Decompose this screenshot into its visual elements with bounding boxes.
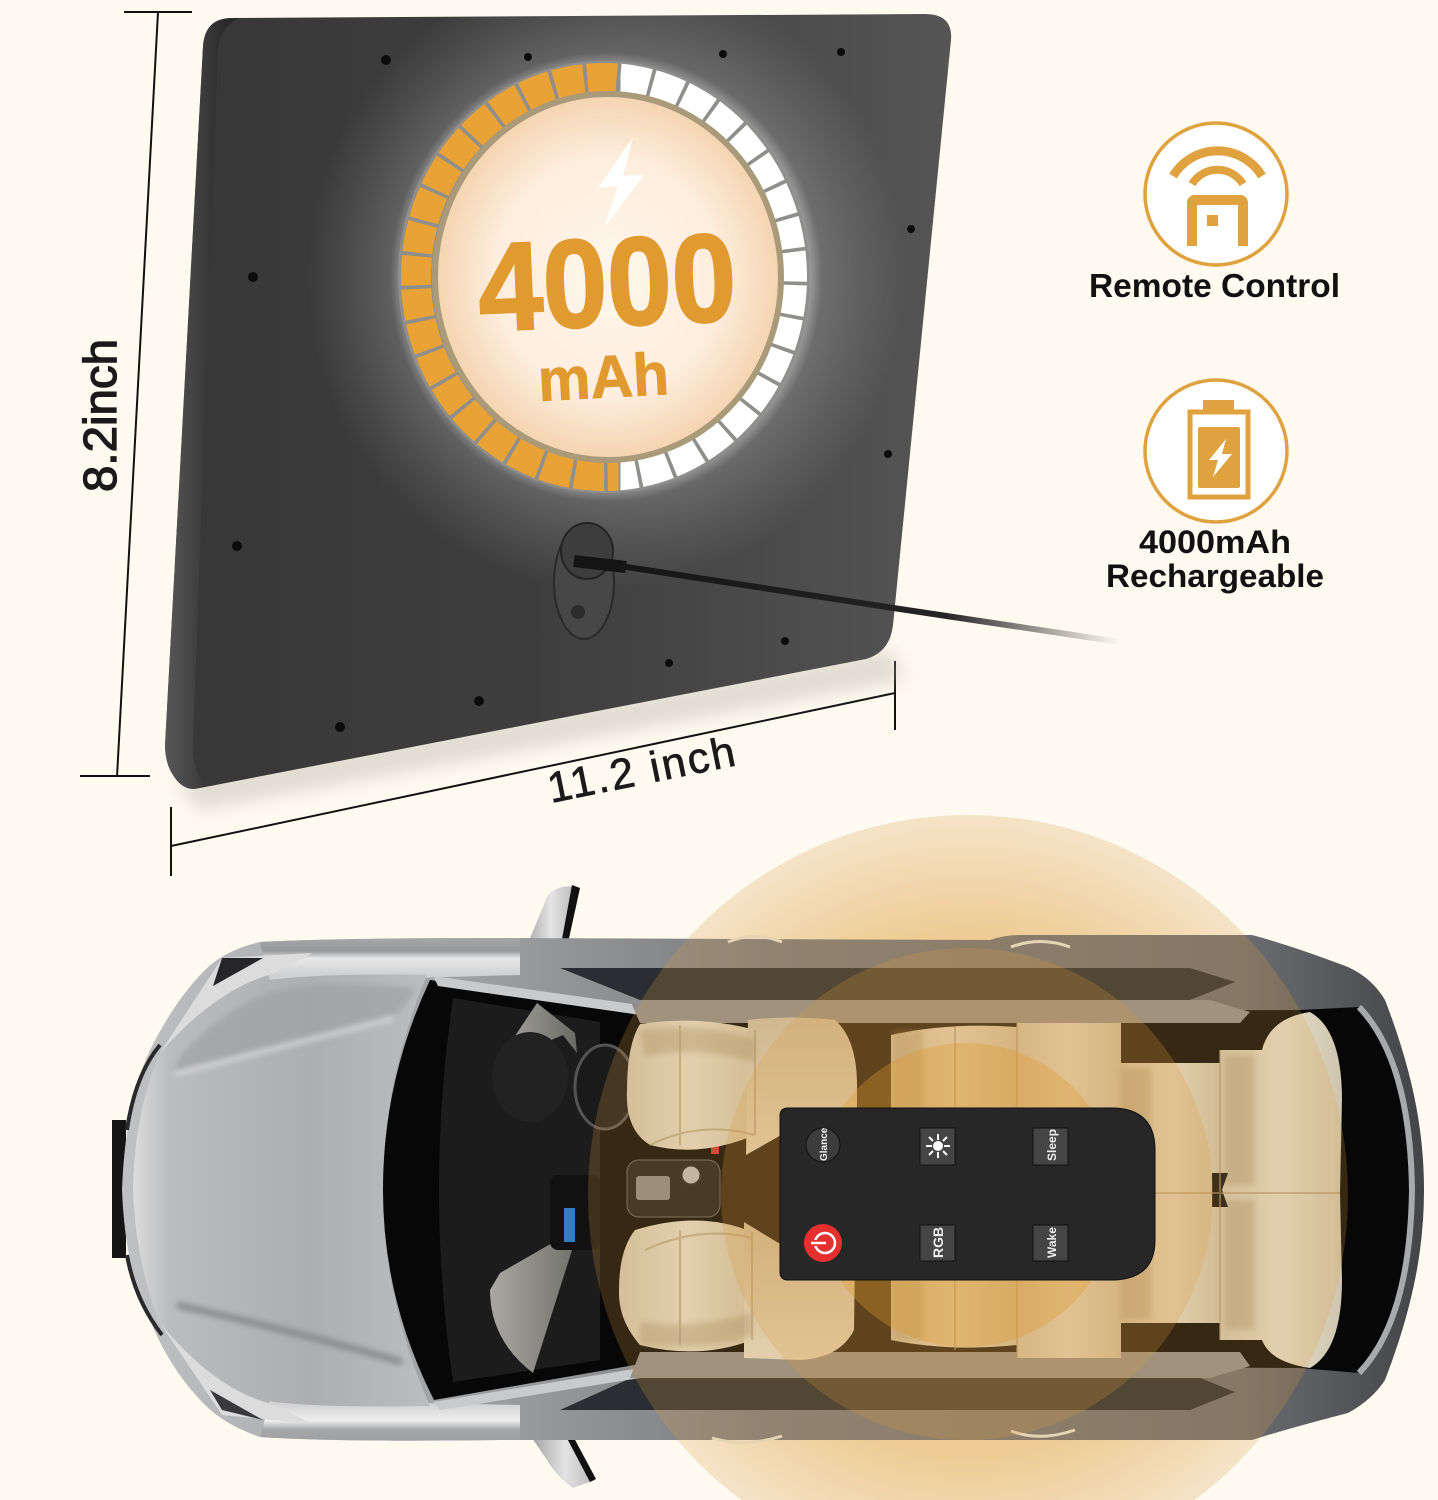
rear window trim (1359, 1007, 1412, 1373)
steering wheel (575, 1045, 635, 1129)
RGB button (920, 1225, 955, 1261)
icon: battery (1145, 380, 1287, 522)
seat notch (1212, 1173, 1228, 1207)
side panel sheen (520, 948, 1240, 1430)
signal range circles (588, 815, 1348, 1500)
nose trim and headlights (127, 953, 313, 1424)
RGB button: RGB (930, 1227, 946, 1258)
headrest (492, 1032, 568, 1122)
sleep button (1033, 1128, 1068, 1165)
height dimension line (80, 12, 192, 777)
front fenders (260, 938, 520, 1441)
middle signal ring (721, 948, 1213, 1440)
middle seats (744, 1018, 857, 1360)
seat seams (645, 1023, 1340, 1358)
inner disc (435, 94, 781, 460)
car body (122, 935, 1424, 1441)
dashboard (439, 998, 600, 1382)
remote control (780, 1108, 1155, 1280)
seat shading (640, 1028, 1255, 1347)
outer signal ring (588, 815, 1348, 1500)
brightness button (920, 1128, 955, 1165)
glance button: Glance (819, 1127, 830, 1161)
roof rails (630, 1000, 1250, 1378)
lightning bolt (598, 137, 644, 228)
windshield and cabin (383, 980, 1412, 1400)
battery ring gauge (398, 61, 810, 493)
door handles (712, 936, 1075, 1443)
charging cable (574, 561, 1120, 642)
hood creases (175, 985, 415, 1362)
sleep button: Sleep (1045, 1129, 1059, 1161)
inner signal ring (814, 1043, 1118, 1347)
front seats (619, 1021, 755, 1351)
wall mount bracket (554, 523, 614, 639)
charged segments (401, 63, 618, 491)
mounting holes (232, 48, 915, 732)
glance button (806, 1127, 840, 1162)
hood (133, 975, 430, 1406)
height label: 8.2inch (74, 339, 126, 492)
remaining segments (620, 64, 807, 490)
A pillars (433, 976, 640, 1410)
icon: remote signal (1145, 123, 1287, 265)
display panel back (165, 0, 1120, 810)
front plate (112, 1120, 126, 1258)
power button (804, 1224, 842, 1262)
label: Rechargeable (1106, 558, 1324, 594)
wake button: Wake (1045, 1227, 1059, 1258)
label: Remote Control (1089, 267, 1340, 304)
capacity unit: mAh (536, 340, 671, 414)
outer signal glow behind car (588, 815, 1348, 1500)
rechargeable feature (1106, 380, 1324, 594)
capacity number: 4000 (475, 207, 739, 358)
centre console (550, 1146, 720, 1250)
label: 4000mAh (1139, 524, 1291, 560)
side windows (560, 968, 1235, 1410)
car top view (112, 885, 1424, 1488)
width dimension line (171, 661, 895, 876)
rear seats (891, 1012, 1342, 1368)
wake button (1033, 1225, 1068, 1261)
remote control feature (1089, 123, 1340, 304)
width label: 11.2 inch (543, 728, 739, 813)
sunlit dashboard patches (490, 1003, 587, 1373)
mirrors (512, 885, 596, 1488)
